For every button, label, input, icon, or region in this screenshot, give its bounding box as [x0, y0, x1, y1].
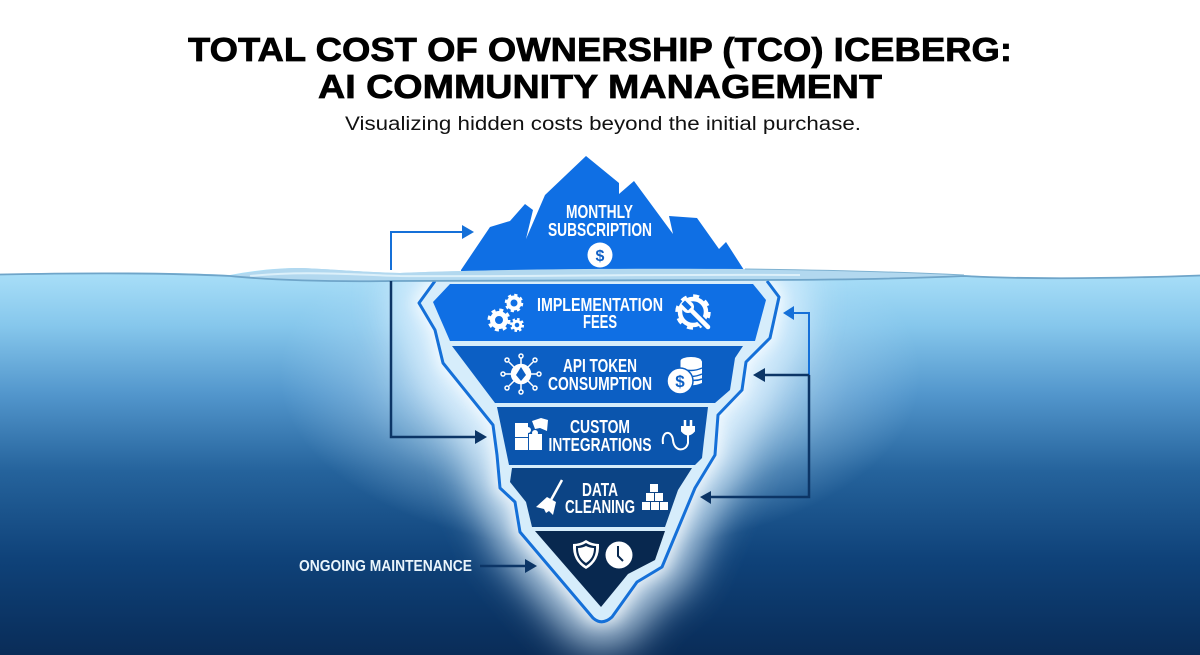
arrow: to custom integrations	[391, 281, 487, 444]
water background	[0, 268, 1200, 655]
iceberg underwater outline	[419, 281, 779, 622]
water surface	[0, 268, 1200, 281]
iceberg tip: monthly subscription: MONTHLY	[566, 202, 633, 222]
iceberg tip: monthly subscription	[461, 156, 744, 276]
arrow: to data cleaning	[700, 375, 809, 504]
icon: gears	[489, 295, 523, 331]
icon: dollar coin: $	[596, 248, 605, 265]
icon: dollar coin	[588, 242, 612, 268]
layer: implementation fees: IMPLEMENTATION	[537, 295, 663, 315]
icon: plug and cable	[663, 420, 694, 449]
arrow: to monthly subscription	[391, 225, 474, 270]
iceberg tip: monthly subscription: SUBSCRIPTION	[548, 220, 652, 240]
layer: implementation fees: FEES	[583, 312, 617, 332]
layer: data cleaning: DATA	[582, 480, 618, 500]
icon: shield	[573, 540, 599, 569]
icon: coin stack: $	[675, 372, 685, 391]
layer: API token consumption: CONSUMPTION	[548, 374, 652, 394]
layer: custom integrations	[497, 407, 708, 465]
icon: data blocks	[642, 484, 668, 510]
layer: API token consumption: API TOKEN	[563, 356, 637, 376]
layer: data cleaning	[510, 468, 692, 527]
icon: token network	[501, 354, 541, 394]
icon: puzzle pieces	[515, 418, 548, 450]
arrow: to implementation fees	[783, 306, 809, 375]
layer: custom integrations: CUSTOM	[570, 417, 630, 437]
arrow: ongoing maintenance	[480, 559, 537, 573]
label: ongoing maintenance: ONGOING MAINTENANCE	[299, 558, 472, 575]
title: AI COMMUNITY MANAGEMENT	[318, 68, 882, 105]
layer: API token consumption	[452, 346, 743, 403]
layer: ongoing maintenance base	[535, 531, 665, 607]
icon: coin stack	[667, 357, 702, 394]
title: TOTAL COST OF OWNERSHIP (TCO) ICEBERG:	[188, 31, 1012, 68]
subtitle: Visualizing hidden costs beyond the initial purchase.	[345, 114, 861, 135]
layer: custom integrations: INTEGRATIONS	[548, 435, 652, 455]
title	[188, 31, 1012, 105]
layer: data cleaning: CLEANING	[565, 497, 635, 517]
icon: clock	[606, 542, 632, 568]
arrow: to API token consumption	[753, 368, 809, 382]
icon: broom	[536, 480, 562, 515]
icon: gear and wrench	[677, 296, 709, 328]
layer: implementation fees	[433, 284, 766, 341]
